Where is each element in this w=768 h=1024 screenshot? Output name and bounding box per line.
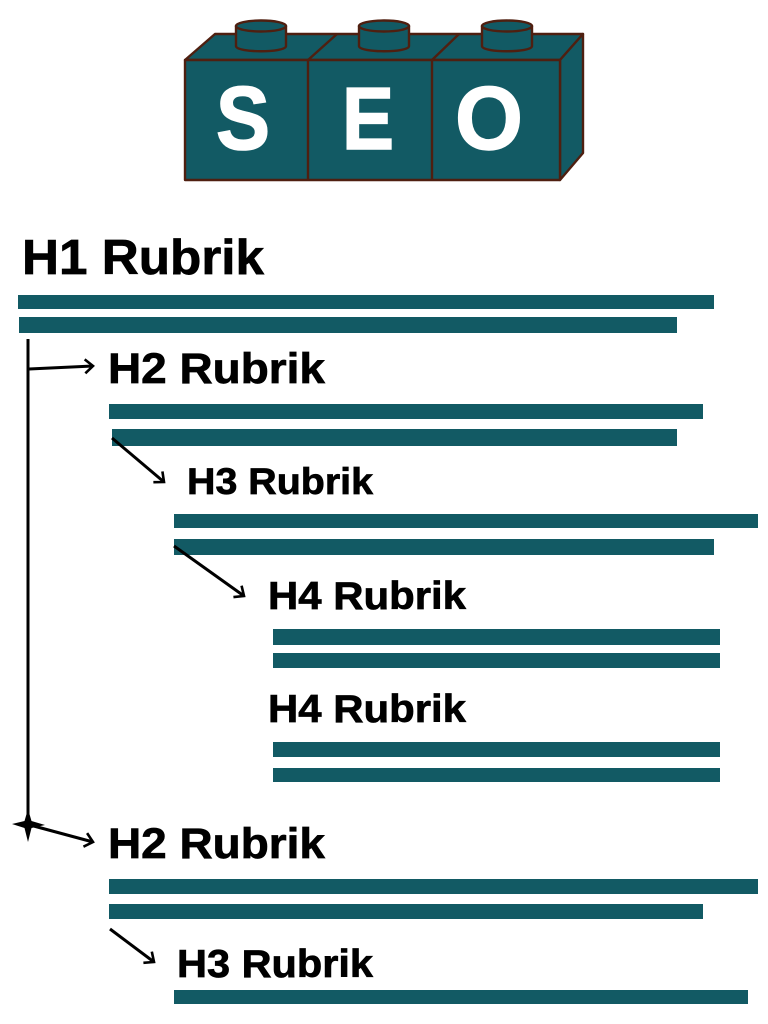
H4 second text bars <box>273 742 720 782</box>
H4 first text bars <box>273 629 720 668</box>
H3 second text bar <box>174 990 748 1004</box>
heading: H3 first: H3 Rubrik <box>187 461 373 502</box>
brick top face <box>185 34 583 60</box>
brick letter O: O <box>455 69 523 169</box>
H1 text bars <box>18 295 714 333</box>
H3 first text bars <box>174 514 758 555</box>
heading: H4 second: H4 Rubrik <box>268 688 466 731</box>
stud 1 <box>236 20 286 51</box>
arrow: to H3 first <box>112 438 164 482</box>
heading: H4 first: H4 Rubrik <box>268 575 466 618</box>
heading: H2 first: H2 Rubrik <box>108 345 325 393</box>
stud 2 <box>359 20 409 51</box>
brick side face <box>560 34 583 180</box>
brick letter S: S <box>216 69 270 169</box>
H2 second text bars <box>109 879 758 919</box>
arrow: to H4 first <box>174 546 244 596</box>
arrow: to H3 second <box>110 929 154 962</box>
icon: four-point star junction <box>12 809 45 842</box>
heading: H3 second: H3 Rubrik <box>177 943 373 986</box>
arrow: main vertical line to H2 <box>28 339 93 825</box>
heading: H1: H1 Rubrik <box>22 231 265 285</box>
arrow: to H2 second <box>30 825 93 842</box>
stud 3 <box>482 20 532 51</box>
brick letter E: E <box>342 69 394 168</box>
brick front face <box>185 60 560 180</box>
H2 first text bars <box>109 404 703 446</box>
brick dividers <box>308 34 459 180</box>
icon: SEO brick <box>185 20 583 180</box>
heading: H2 second: H2 Rubrik <box>108 820 325 868</box>
